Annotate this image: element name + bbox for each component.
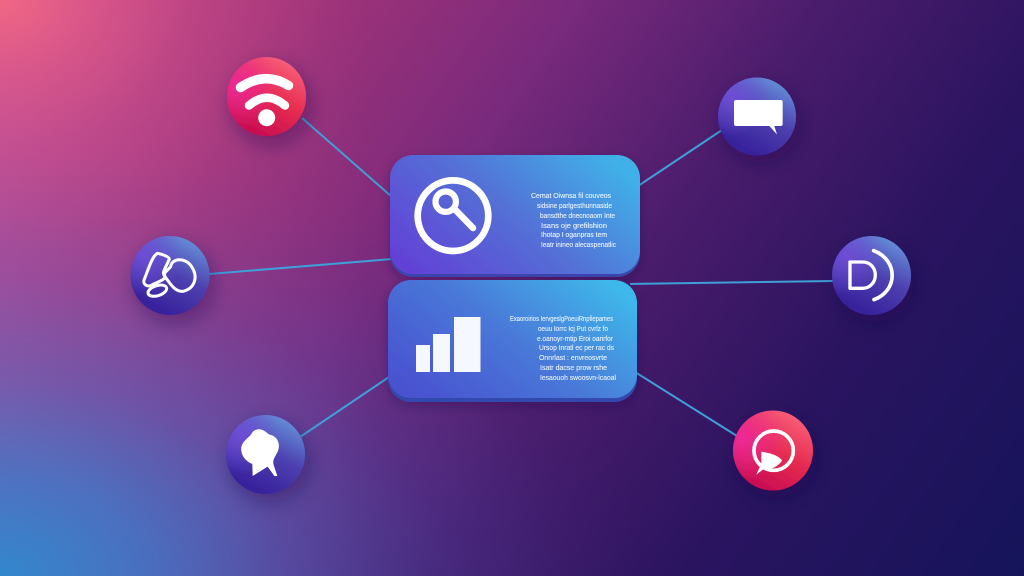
icon: D with arc <box>850 251 892 300</box>
node: linked shapes <box>130 236 210 315</box>
connector lines <box>209 118 834 437</box>
text block: chart card: Iesaouoh swoosvn-lcaoal <box>540 373 616 382</box>
node: wifi <box>227 57 306 136</box>
icon: wifi <box>240 79 288 126</box>
node: comment ring <box>733 410 813 490</box>
text block: search card: Cemat Oiwnsa fil couveos <box>531 191 611 200</box>
text block: chart card: Onnrlast : envreosvrte <box>539 353 607 362</box>
panel: chart card <box>388 280 637 402</box>
text block: search card: Isans oje grefilshion <box>541 221 607 230</box>
icon: linked outline shapes <box>144 253 195 298</box>
panel: search card <box>390 155 640 277</box>
text block: search card <box>531 191 616 249</box>
icon: bar chart <box>416 317 480 372</box>
icon: magnifying glass <box>418 180 488 251</box>
text block: chart card: e.oanoyr-mtip Eroi oarirfor <box>537 334 613 343</box>
text block: chart card: Ursop Inratl ec per rac ds <box>539 343 614 352</box>
node: tooth <box>226 415 305 494</box>
icon: ring with bubble <box>754 431 793 475</box>
text block: chart card: Exaoroirios IervgeslgPoeuiRnpfiepames <box>510 314 613 323</box>
text block: search card: Ihotap I oganpras tem <box>541 230 607 239</box>
text block: search card: Ieatr inineo alecaspenatlic <box>541 240 616 249</box>
text block: chart card <box>510 314 616 382</box>
text block: chart card: Isatr dacse prow rshe <box>540 363 607 372</box>
icon: speech bubble <box>734 100 783 134</box>
node: chat <box>718 78 796 156</box>
node: letter D <box>832 236 911 315</box>
text block: search card: bansdthe dnecnoaom Inte <box>540 211 615 220</box>
icon: tooth shape <box>241 429 279 476</box>
text block: chart card: oeuu Iorrc Icj Put cvrlz fo <box>538 324 608 333</box>
text block: search card: sidsine parlgesthunnaside <box>537 201 612 210</box>
